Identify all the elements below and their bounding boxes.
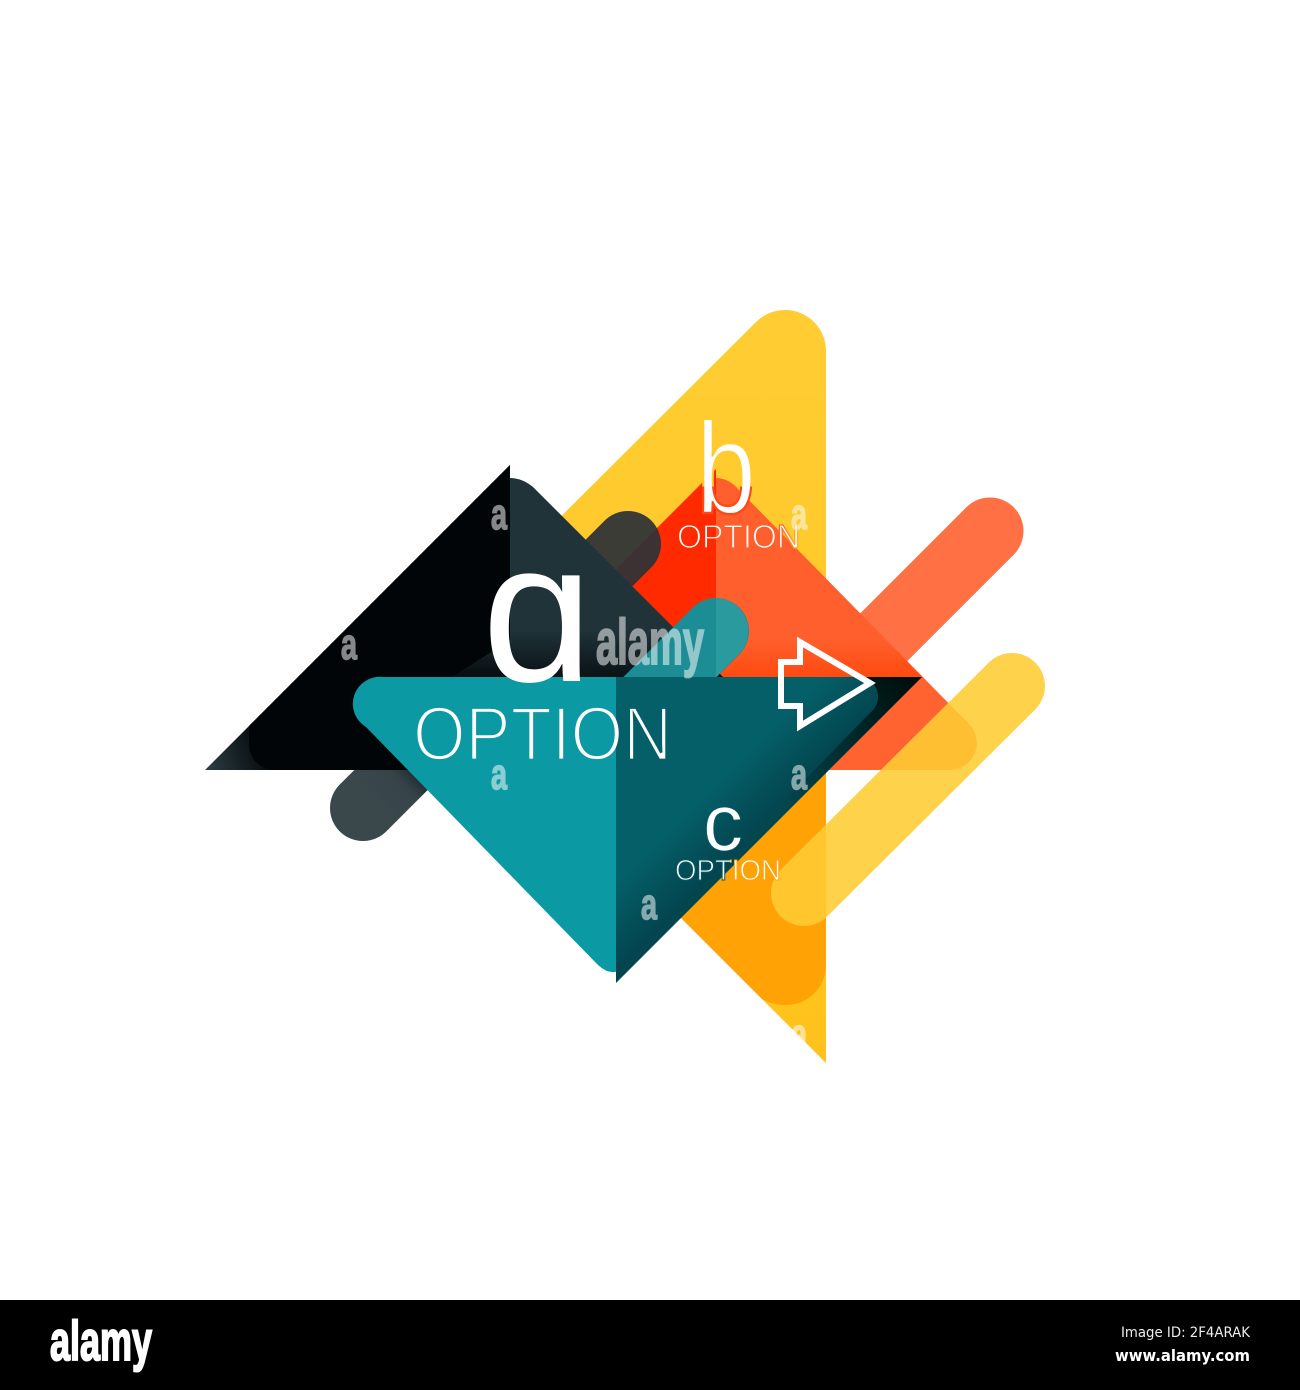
footer logo: alamy bbox=[50, 1309, 152, 1372]
watermark: alamy: alamy bbox=[596, 606, 704, 678]
icon: arrow outline bbox=[781, 642, 870, 726]
footer bar bbox=[0, 1300, 1300, 1390]
panel: yellow triangle bbox=[420, 310, 826, 1063]
watermark: alamy: a bbox=[341, 620, 357, 669]
watermark: alamy: a bbox=[641, 880, 657, 929]
watermark: alamy: a bbox=[491, 490, 507, 539]
panel: teal triangle a bbox=[353, 677, 922, 983]
text: letter c: c bbox=[703, 778, 743, 867]
text: letter a: ɑ bbox=[482, 501, 593, 724]
footer image id: Image ID: 2F4ARAK bbox=[1121, 1325, 1251, 1341]
watermark: alamy bbox=[341, 490, 807, 1059]
text: letter b: b bbox=[696, 395, 756, 541]
footer url: www.alamy.com bbox=[1115, 1346, 1250, 1365]
bar: dark diagonal stripe top bbox=[520, 544, 628, 652]
watermark: alamy: a bbox=[791, 750, 807, 799]
bar: teal diagonal stripe bbox=[640, 598, 748, 707]
text: OPTION a: OPTION bbox=[413, 692, 672, 777]
text: OPTION c: OPTION bbox=[675, 855, 781, 887]
text: OPTION b: OPTION bbox=[677, 518, 800, 555]
panel: dark triangle a bbox=[205, 465, 816, 770]
watermark: alamy: a bbox=[491, 750, 507, 799]
bar: dark diagonal stripe bottom bbox=[363, 726, 445, 808]
bar: orange diagonal stripe bbox=[800, 531, 990, 721]
watermark: alamy: a bbox=[791, 1010, 807, 1059]
watermark: alamy: a bbox=[791, 490, 807, 539]
bar: yellow diagonal stripe bbox=[804, 686, 1012, 893]
panel: orange triangle b bbox=[500, 469, 977, 770]
